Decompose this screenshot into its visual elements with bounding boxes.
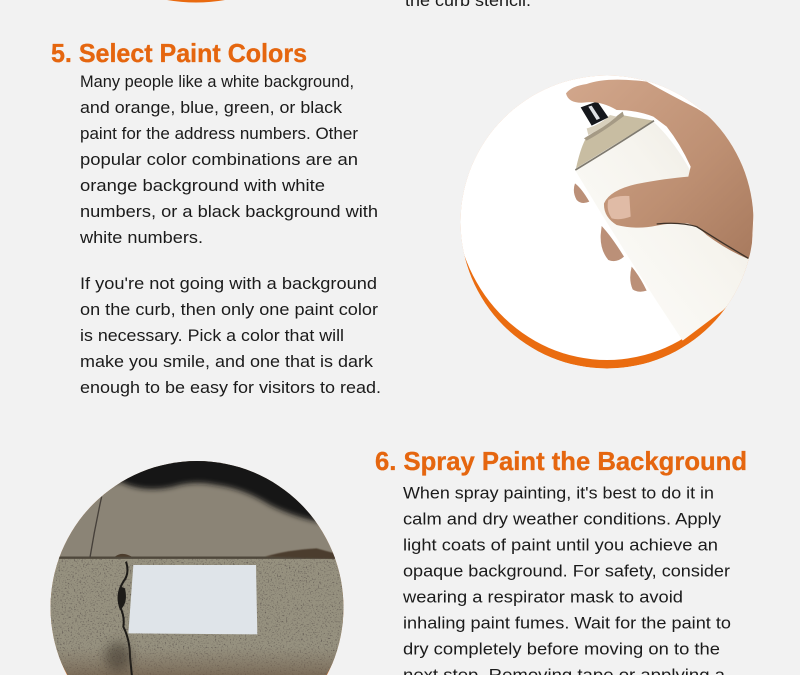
text block: spray painting instructions [402, 484, 731, 675]
black overspray [114, 461, 318, 526]
heading: 6. Spray Paint the Background: 6. Spray Paint the Background [375, 446, 747, 476]
lower curb face [47, 558, 347, 675]
curb seam [58, 556, 335, 559]
text block: spray painting instructions: When spray painting, it's best to do it in [403, 484, 714, 502]
text block: spray painting instructions: calm and dry weather conditions. Apply [403, 510, 722, 528]
text block: single paint color advice: is necessary. Pick a color that will [80, 326, 344, 345]
text block: spray painting instructions: inhaling paint fumes. Wait for the paint to [403, 614, 731, 632]
image: curb with white spray painted rectangle in circle [47, 443, 347, 675]
text block: paint color advice: numbers, or a black background with [80, 202, 378, 221]
upper curb surface [59, 461, 335, 558]
text block: single paint color advice: on the curb, then only one paint color [80, 300, 378, 319]
previous section circle orange edge [167, 0, 225, 2]
lower fingers behind can [574, 183, 647, 292]
text block: paint color advice: popular color combinations are an [80, 150, 358, 169]
text block: single paint color advice: enough to be easy for visitors to read. [80, 378, 381, 397]
text block: single paint color advice: If you're not going with a background [80, 274, 377, 293]
thumbnail [608, 196, 631, 219]
collar [584, 112, 624, 141]
text block: paint color advice: Many people like a white background, [80, 72, 354, 91]
text block: paint color advice: white numbers. [79, 228, 203, 247]
can body [575, 122, 750, 341]
text block: spray painting instructions: dry completely before moving on to the [403, 640, 720, 658]
concrete speckle [47, 558, 347, 675]
text block: paint color advice: orange background with white [80, 176, 325, 195]
hand [566, 80, 753, 259]
white rectangle [128, 565, 257, 634]
text block: single paint color advice: make you smile, and one that is dark [80, 352, 374, 371]
heading: 5. Select Paint Colors: 5. Select Paint Colors [51, 38, 307, 68]
text block: spray painting instructions: wearing a respirator mask to avoid [402, 588, 683, 606]
text block: paint color advice [79, 72, 378, 247]
crack [119, 562, 132, 675]
can shoulder [576, 115, 653, 168]
text block: single paint color advice [80, 274, 381, 397]
image: hand holding spray can in circle [460, 76, 754, 368]
text block: spray painting instructions: light coats of paint until you achieve an [403, 536, 718, 554]
nozzle [581, 101, 608, 126]
text block: spray painting instructions: opaque background. For safety, consider [403, 562, 730, 580]
text block: paint color advice: and orange, blue, green, or black [80, 98, 343, 117]
text block: paint color advice: paint for the address numbers. Other [80, 124, 358, 143]
